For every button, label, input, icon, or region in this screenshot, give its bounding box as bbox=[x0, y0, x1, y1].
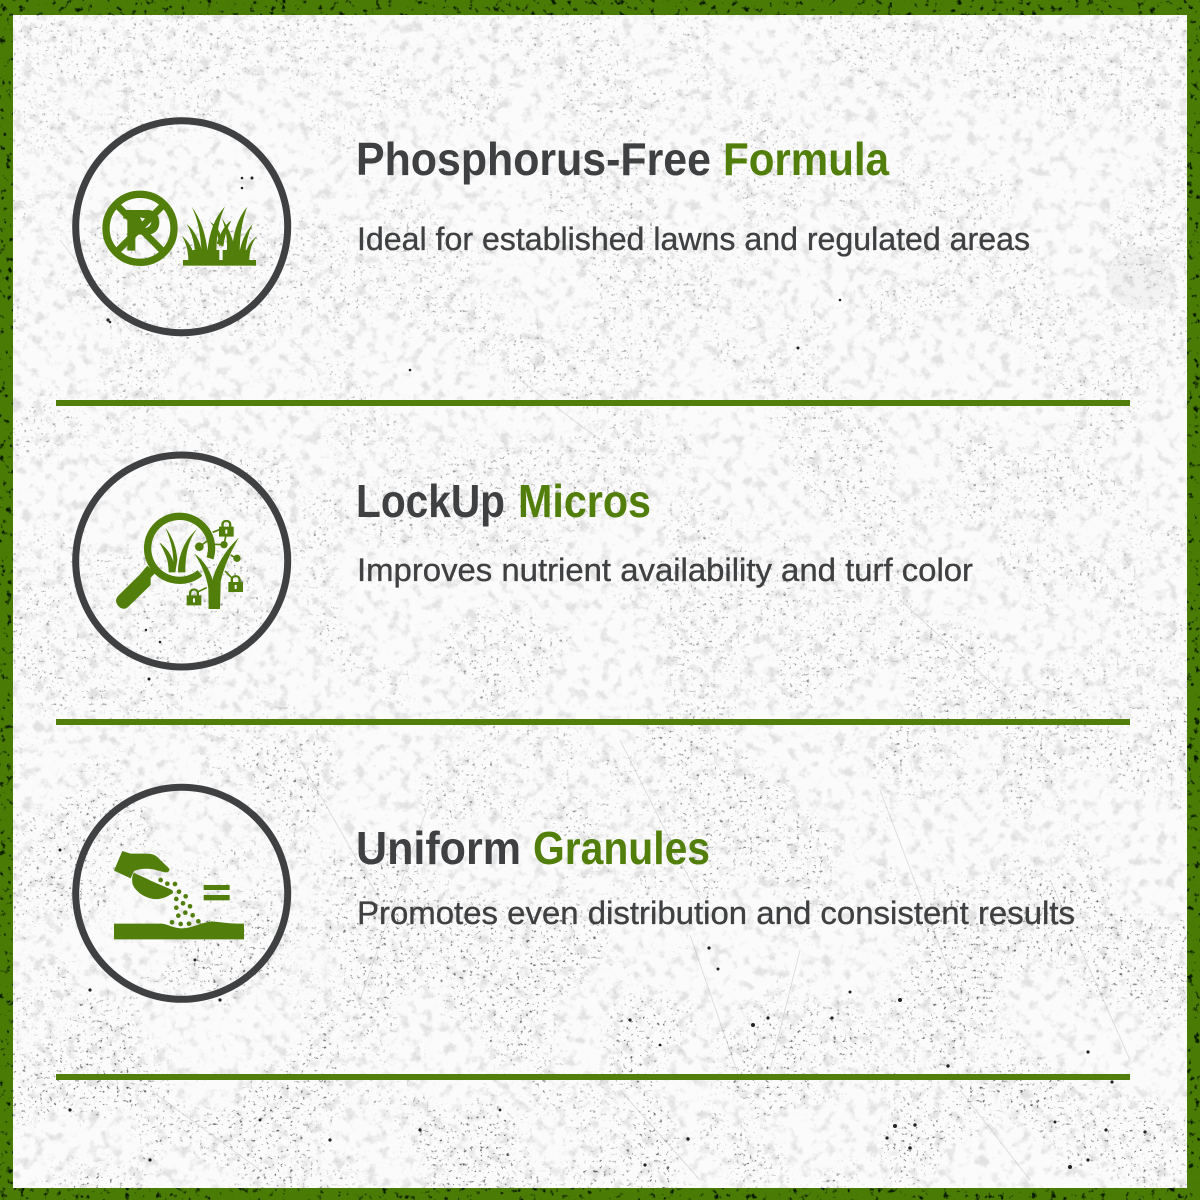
title 1: Phosphorus-Free bbox=[356, 133, 711, 185]
divider 3 bbox=[56, 1074, 1130, 1080]
title 1: Formula bbox=[723, 133, 889, 185]
icon: no phosphorus and grass bbox=[106, 194, 257, 266]
icon: hand spreading granules bbox=[114, 851, 244, 939]
title 2 bbox=[356, 475, 651, 527]
title 2: Micros bbox=[518, 475, 651, 527]
title 2: LockUp bbox=[356, 475, 505, 527]
text 1: Ideal for established lawns and regulated areas bbox=[357, 221, 1030, 257]
divider 2 bbox=[56, 719, 1130, 725]
icon: magnifier with locked nutrients bbox=[116, 516, 243, 609]
icon ring 2 bbox=[76, 455, 288, 667]
text 3: Promotes even distribution and consistent results bbox=[357, 895, 1075, 931]
icon ring 1 bbox=[76, 121, 288, 333]
title 3: Uniform bbox=[356, 822, 521, 874]
icon ring 3 bbox=[76, 787, 288, 999]
text 2: Improves nutrient availability and turf color bbox=[357, 552, 973, 588]
divider 1 bbox=[56, 400, 1130, 406]
title 3: Granules bbox=[533, 822, 710, 874]
title 3 bbox=[356, 822, 710, 874]
